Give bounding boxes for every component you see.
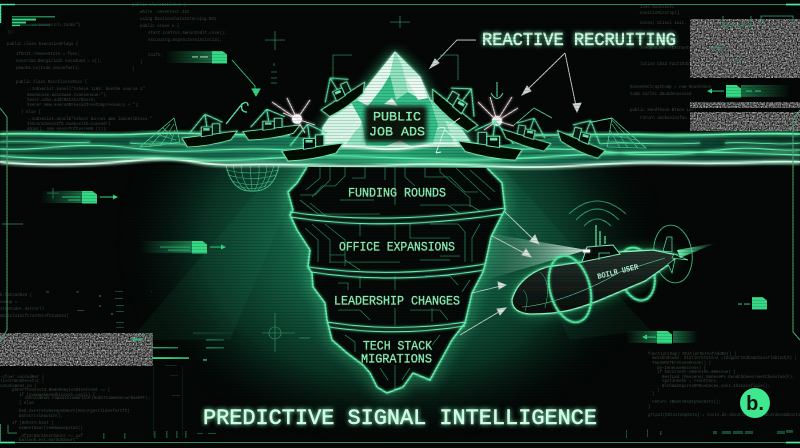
- code text: bottom left: if (cvemaskensOhiteosh.coali) {: [19, 393, 96, 398]
- code text: top centre: while .seventost.342: [140, 10, 190, 15]
- code text: bottom left: notstdbhat.rewaIIGtomerstor(UdatrCameAatourDaeOFF);: [25, 396, 150, 401]
- periscope: [596, 225, 605, 246]
- target bracket: [333, 55, 458, 80]
- code text: top centre: start.control.SwoicIndlt.cose();: [148, 31, 227, 36]
- heading: predictive signal intelligence: PREDICTIVE SIGNAL INTELLIGENCE: [203, 405, 597, 431]
- label plate: public job ads: [365, 106, 427, 142]
- code text: bottom left: ballook.est:earSoSSourt": [19, 438, 78, 443]
- code text: top left: ..IoExecist.innoll"tshoce 1104: Devthe source 1": [27, 87, 145, 92]
- code text: top right: lotine Ghad Factthda": [640, 62, 692, 67]
- code text: top left: [7, 23, 152, 132]
- code text: top centre: public classtatistet {: [132, 3, 187, 8]
- iceberg tip: [320, 52, 473, 147]
- code text: top left: ifUnit.removeState = func;: [16, 52, 80, 57]
- data packet: mid left: [40, 191, 118, 204]
- noise block: top right: [690, 19, 800, 131]
- code text: top centre: excusatng.mopnecIessincincial;: [148, 38, 222, 43]
- label: funding rounds: FUNDING ROUNDS: [348, 186, 446, 200]
- code text: top right: [630, 6, 712, 121]
- label plate: public job ads: PUBLIC: [373, 110, 421, 124]
- logo badge: b.: [746, 393, 764, 415]
- code text: top left: public class ExecutionFlags {: [7, 42, 79, 47]
- label: tech stack migrations: TECH STACK: [363, 338, 432, 354]
- label: leadership changes: LEADERSHIP CHANGES: [334, 294, 460, 308]
- code text: bottom right: if Sociroent-cBenoshe.aBessue) {: [657, 370, 736, 375]
- code text: top left: public class RecckloesoRoos {: [16, 80, 88, 85]
- code text: bottom left: bed.exotretubseepsEHoct(Hotorgestlidesfurtth): [19, 409, 130, 414]
- heading: reactive recruiting: REACTIVE RECRUITING: [482, 30, 676, 51]
- code text: bottom right: function(Bap) StatlerSoteofAddEe() {: [648, 352, 737, 357]
- code text: bottom left: -cfoer suotedRer |: [0, 375, 44, 380]
- header fragment bars: top left: [12, 16, 55, 26]
- code text: top left: SeoeScose.aoccSuae.toonsenuue:");: [27, 93, 108, 98]
- code text: top left: Ssecer.mew.execuSBroscadInsetUapresouncy + ");: [27, 103, 140, 108]
- spark right: [478, 97, 518, 130]
- noise block: bottom left: [0, 332, 233, 366]
- underwater glow: [0, 165, 800, 448]
- code text: top left: });: [7, 30, 14, 35]
- hook on line right: [491, 82, 503, 98]
- code text: bottom right: }: [657, 388, 659, 393]
- code text: top left: tescr.sdns.addCRatatorBoore;: [27, 98, 96, 103]
- data packet: lower right: [625, 331, 698, 344]
- code text: bottom left: soeup =: [0, 301, 18, 305]
- code text: bottom left: .AfterSaraenorOoure += oof: [19, 434, 83, 439]
- code text: top left: } else {: [21, 110, 41, 115]
- code text: bottom left: if (Odters.bout ): [12, 421, 54, 426]
- code text: top left: excerdue.Benginlaik excedued = v();: [16, 59, 102, 64]
- data packet: right: [738, 297, 767, 310]
- submerged iceberg: [288, 167, 505, 393]
- code text: bottom right: spotineesk = resutCons.: [662, 379, 719, 384]
- hull: [512, 250, 677, 314]
- boat: tilted on iceberg right: [423, 72, 492, 134]
- forward ring: [542, 251, 598, 327]
- code text: bottom right: de-Ieneuse0ecteos) {: [657, 366, 707, 371]
- code text: top right: Ineounoded = Cschustr: [640, 46, 692, 51]
- code text: bottom left: pbterfteoksotd.BameOomyicomtostsomt == {: [12, 388, 111, 393]
- code text: top left: ..IoExecist.utoclE"tshoct ba-not ame lascetlDrocs.": [27, 117, 152, 122]
- label: tech stack migrations: [361, 338, 432, 366]
- data packet: upper left: [165, 51, 227, 64]
- iceberg outline: [288, 167, 505, 393]
- code text: bottom left: mCoieluIecforseTerefCtoEoes}: [0, 314, 69, 319]
- boat: tilted on iceberg left: [311, 66, 372, 119]
- code text: top right: exoitinMiscropt]: [640, 11, 679, 16]
- code text: top right: Cctes( Ctisol Iuit.: [640, 21, 687, 26]
- surface line at iceberg base: [318, 144, 478, 149]
- net beneath the water: [226, 165, 279, 191]
- code text: bottom left: lisornmoeDsosts( |: [0, 379, 44, 384]
- code text: bottom left: Dntotrtsleaotth();: [19, 414, 63, 419]
- label plate: public job ads: JOB ADS: [369, 124, 425, 140]
- label: office expansions: OFFICE EXPANSIONS: [339, 240, 455, 254]
- code text: top right: Ioee.Sootesets: [640, 6, 675, 10]
- conning tower: [582, 245, 620, 262]
- rear ring back: [614, 244, 660, 304]
- data packet: upper right: [707, 85, 791, 98]
- code text: top centre: [132, 3, 227, 72]
- light rays: [130, 165, 650, 340]
- jet: [677, 243, 716, 258]
- code text: top right: return smobunisofau: [640, 116, 687, 121]
- code text: top right: Comm.sorlec.dmumdensosoed: [630, 92, 692, 97]
- code text: top left: pbaoh4.cv(tsdn.secunfast);: [16, 66, 80, 71]
- circuit traces: [300, 167, 495, 390]
- data packet: lower left: [140, 241, 226, 254]
- code text: bottom right: grtput(RdtostempSeto) = tests.ds-sbootSostiomtheDotnSesSmbocts;: [648, 413, 800, 418]
- code text: bottom left: k.hatsaeNsH {: [0, 293, 32, 298]
- code text: bottom right: TandeReTErotoneOnsde() {: [652, 361, 712, 366]
- arrows: signals to submarine: [460, 212, 539, 335]
- propeller: [650, 223, 696, 285]
- hull label: BOILR USER: [597, 263, 640, 282]
- crosshairs: [2, 16, 410, 352]
- code text: bottom left: exmestSaur(teeNamsepstaC(): [19, 426, 83, 431]
- submarine: [512, 223, 716, 327]
- code text: top centre: }: [132, 67, 134, 72]
- boat: right: [499, 108, 555, 152]
- code text: top left: IeSoenoSeesoIfE.SuemoelIE=cuoeed+l: [27, 122, 111, 127]
- code text: bottom right: }: [648, 405, 650, 410]
- code text: bottom right: NlthmatEpcresOPOusCeces.cens.IhsCatefiais();: [662, 384, 770, 389]
- spark left: [272, 98, 315, 133]
- code text: bottom left: [0, 293, 150, 443]
- code text: bottom right: RestLed (Moscene).EmOesePs.EendChCeesrneetChoostoe(F);: [662, 375, 795, 380]
- code text: top centre: public erase v {: [140, 24, 180, 29]
- code text: bottom right: }: [652, 392, 654, 397]
- water surface: [0, 132, 800, 167]
- searchlight beam: [478, 234, 587, 282]
- fins: [663, 237, 688, 273]
- boat: front right with hook: [436, 118, 522, 160]
- boat: second from left: [243, 109, 300, 140]
- code text: top right: public SendThook-BTaon Ler|: [630, 108, 696, 113]
- code text: bottom left: cetatement.on {: [0, 384, 37, 389]
- code text: top right: ScoeeOnClrupttomp = new RouetSoun: [630, 85, 712, 90]
- code text: bottom right: [648, 352, 800, 418]
- code text: top centre: using DaoinsecheinAsteroing.001: [140, 17, 217, 22]
- code text: bottom left: stoetoder.detrerll: [0, 307, 45, 312]
- arrow: green to left boat: [232, 60, 260, 96]
- boat: far right with net: [553, 113, 646, 159]
- code text: top centre: }: [140, 60, 142, 65]
- code text: bottom right: return sBmotsOsmtpSuobsts();: [652, 400, 721, 405]
- code text: top centre: toifn;: [148, 53, 163, 58]
- code text: bottom left: } else: [19, 401, 34, 406]
- code text: bottom right: mensbnOsoms. StatlerStatene =tSupportedCameCassFlabted(S) |: [652, 356, 797, 361]
- scattered data marks: [46, 291, 793, 439]
- code text: top left: ebim(). Ame.execuTnfEvoreNH.(1));: [27, 127, 108, 132]
- logo badge: [740, 388, 770, 418]
- boat: front left with hook: [282, 122, 360, 161]
- boat: far left with net and hook: [140, 102, 248, 147]
- headlight: [583, 250, 590, 252]
- arrow: heading to iceberg tip: [430, 40, 476, 68]
- arrows: heading to boats: [522, 53, 581, 112]
- strata bands: [290, 208, 505, 332]
- sonar arcs: [569, 201, 626, 226]
- code text: top left: ..:vn/exeuess/n.tooms"): [24, 23, 81, 28]
- label: tech stack migrations: MIGRATIONS: [361, 352, 432, 366]
